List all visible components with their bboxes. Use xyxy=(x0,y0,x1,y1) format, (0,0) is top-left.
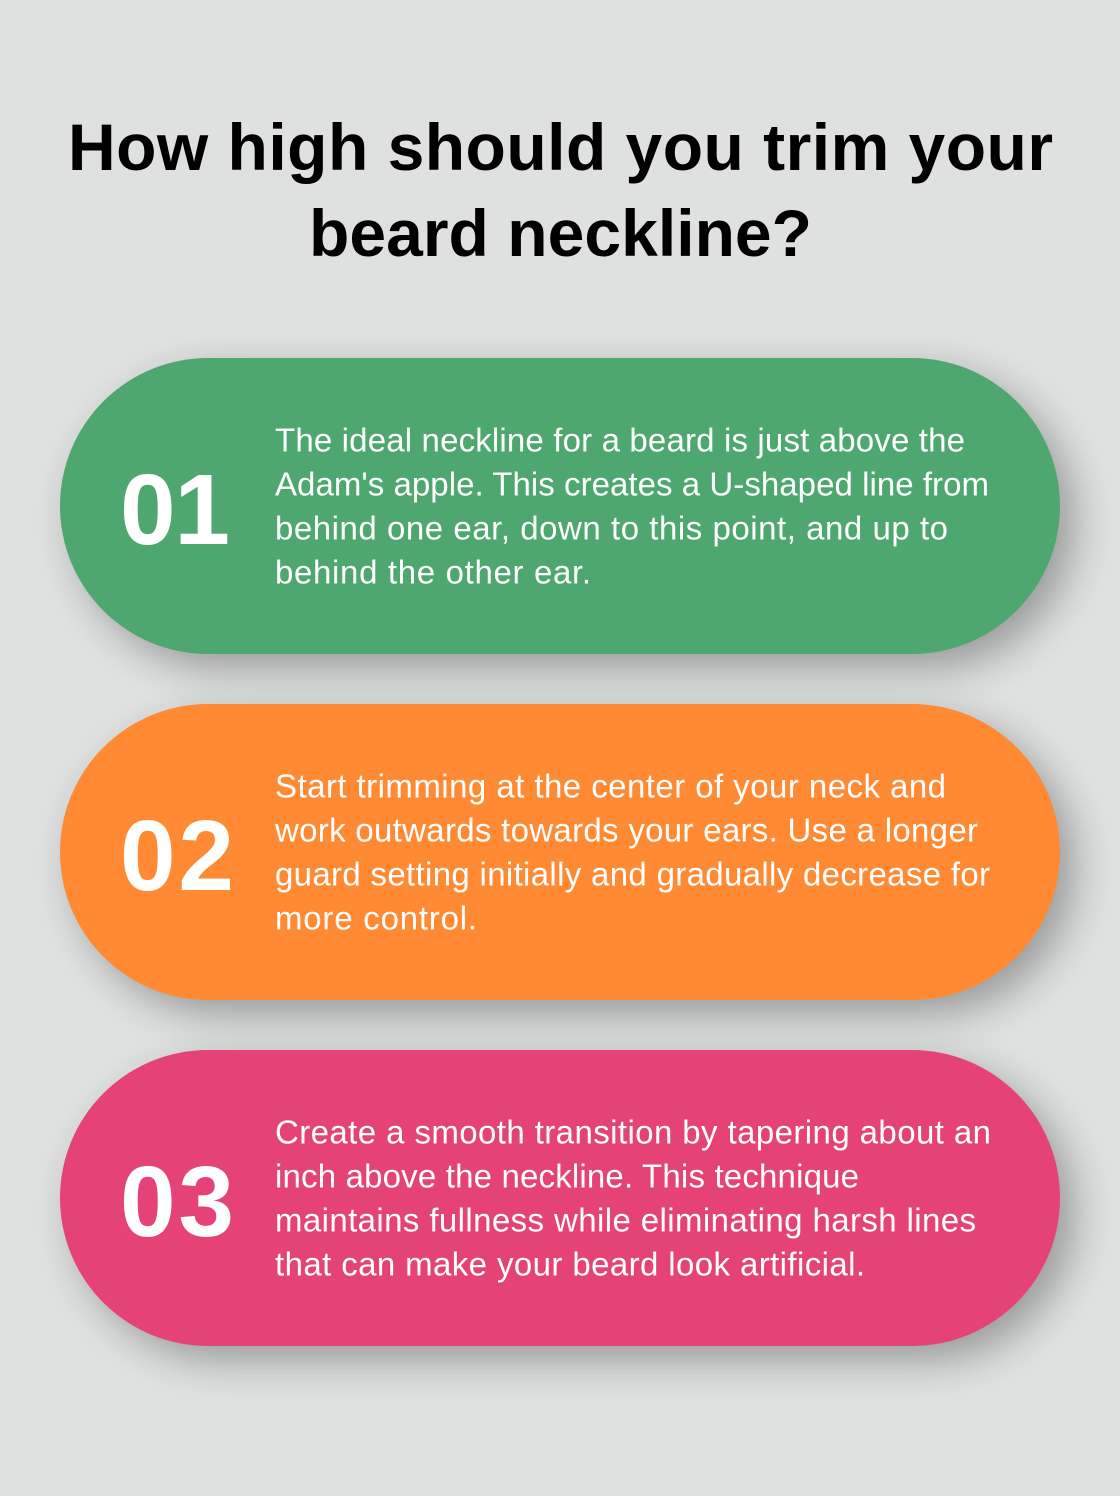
title xyxy=(68,110,1053,270)
step 2 text: guard setting initially and gradually decrease for xyxy=(275,856,990,893)
step 2 text: Start trimming at the center of your neck and xyxy=(275,768,946,805)
step 2 text: work outwards towards your ears. Use a longer xyxy=(274,812,978,849)
step 3 text: Create a smooth transition by tapering about an xyxy=(275,1114,991,1151)
step 3 text: maintains fullness while eliminating harsh lines xyxy=(275,1202,976,1239)
step 1 text: The ideal neckline for a beard is just above the xyxy=(275,422,965,459)
title: How high should you trim your xyxy=(68,110,1053,184)
step 1 text xyxy=(275,422,989,591)
step 3 text: that can make your beard look artificial. xyxy=(275,1246,865,1283)
panel: step 3 card xyxy=(60,1050,1060,1346)
step 3 number: 03 xyxy=(120,1146,234,1258)
step 1 text: behind the other ear. xyxy=(275,554,591,591)
step 3 text xyxy=(275,1114,991,1283)
step 1 number: 01 xyxy=(120,454,230,566)
step 2 number: 02 xyxy=(120,800,234,912)
step 1 text: behind one ear, down to this point, and up to xyxy=(275,510,948,547)
step 3 text: inch above the neckline. This technique xyxy=(275,1158,859,1195)
panel: step 1 card xyxy=(60,358,1060,654)
panel: step 2 card xyxy=(60,704,1060,1000)
step 1 text: Adam's apple. This creates a U-shaped line from xyxy=(275,466,989,503)
step 2 text xyxy=(274,768,990,937)
step 2 text: more control. xyxy=(275,900,477,937)
title: beard neckline? xyxy=(309,196,812,270)
